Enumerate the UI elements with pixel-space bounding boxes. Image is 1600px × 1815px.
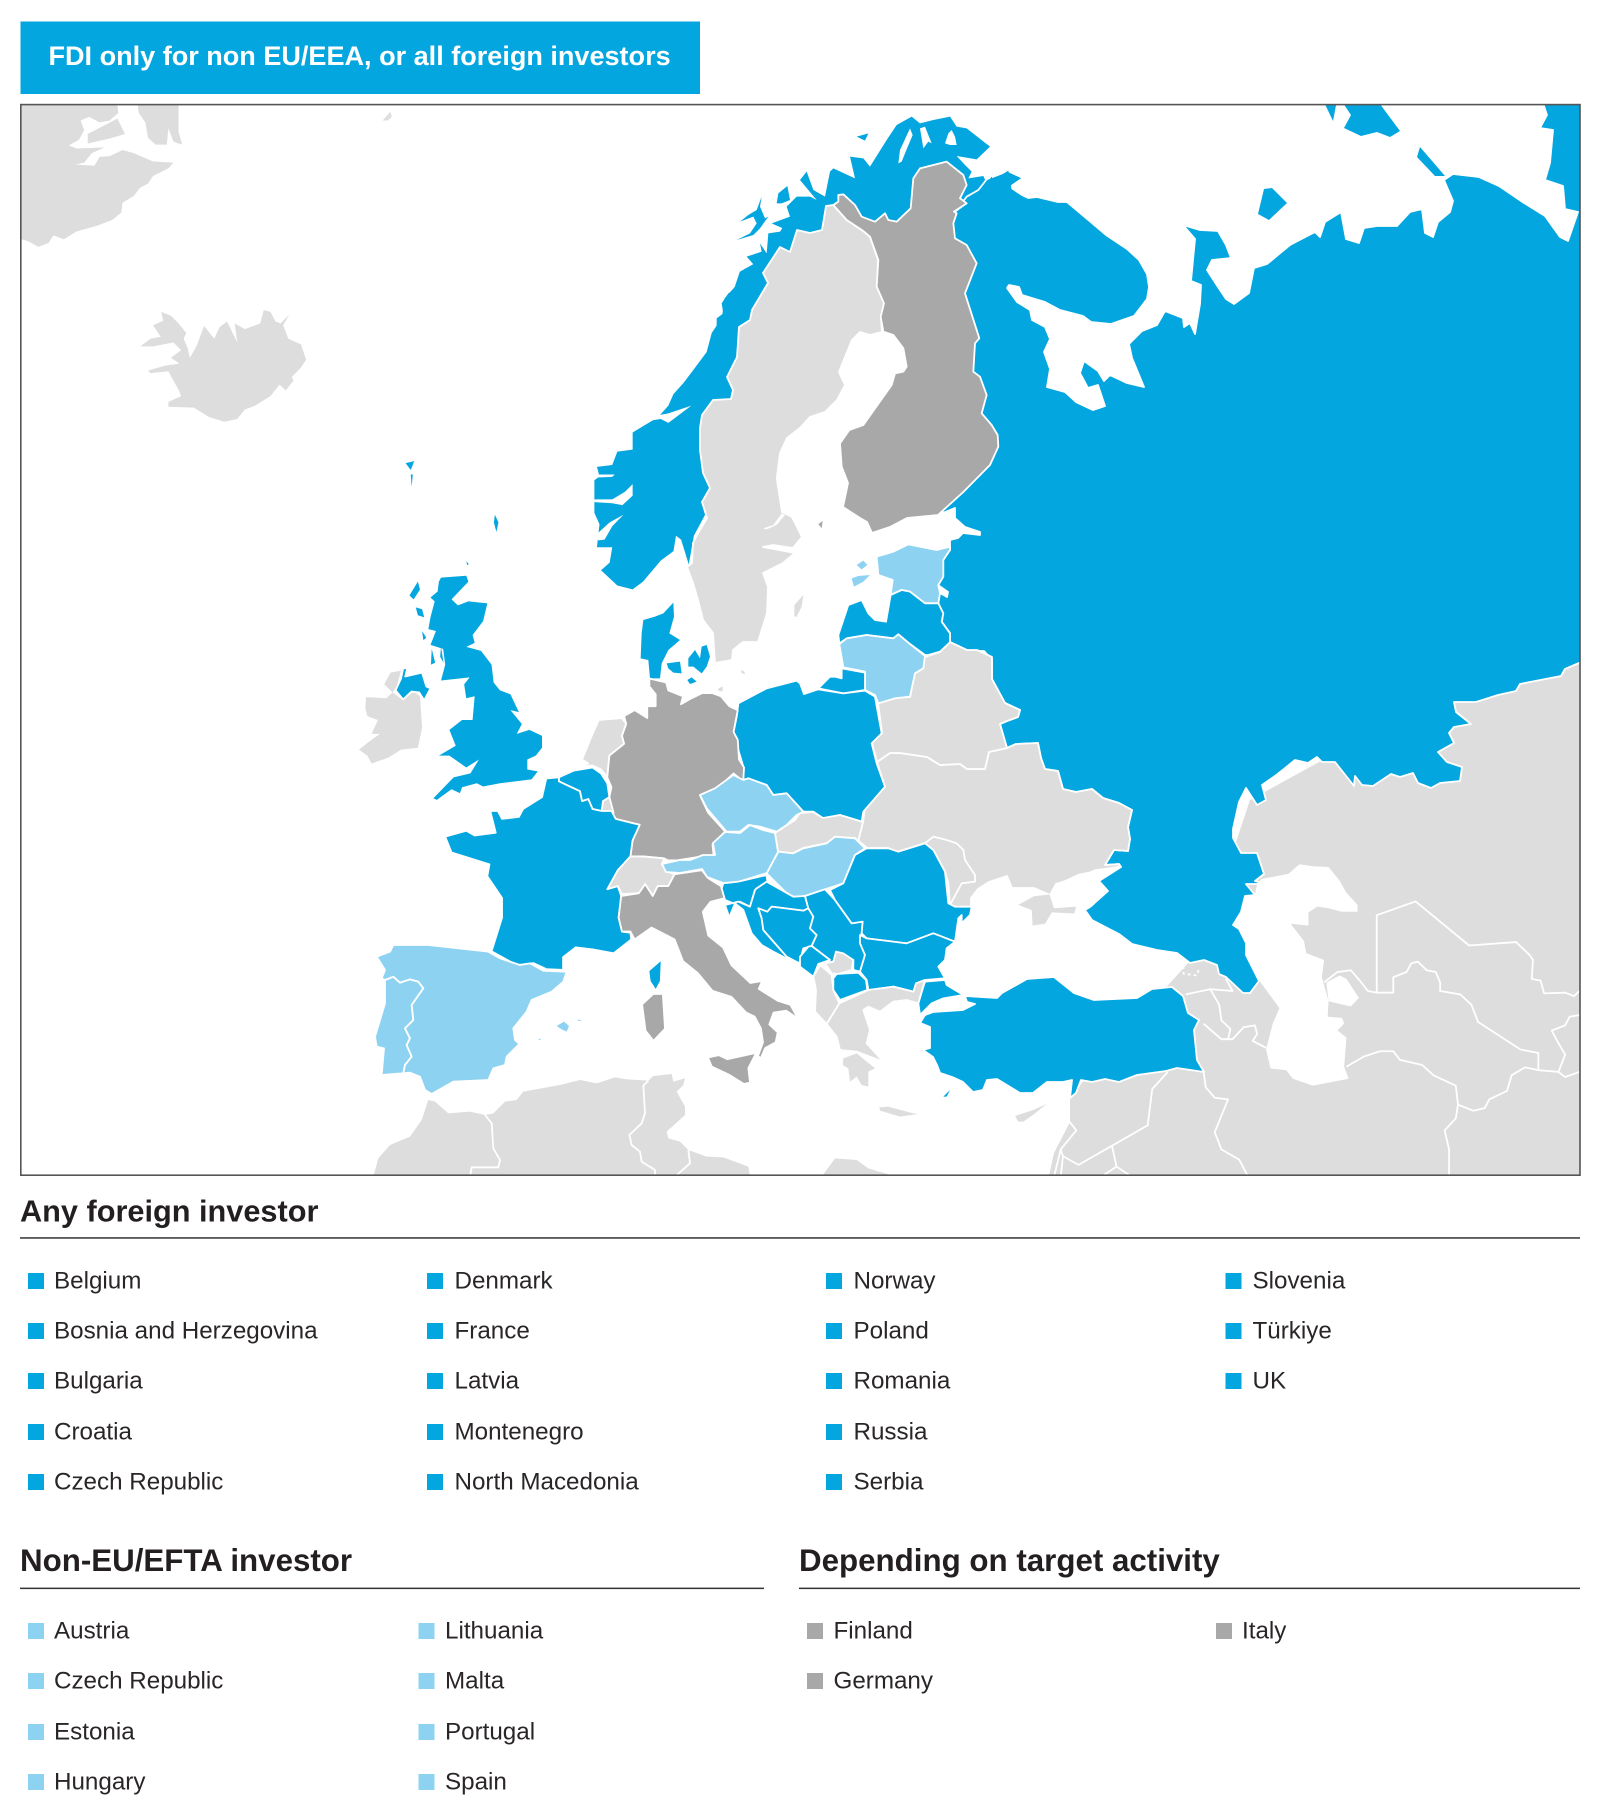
Denmark bbox=[641, 603, 745, 692]
Slovakia bbox=[775, 812, 865, 853]
Romania bbox=[830, 843, 972, 943]
Lithuania bbox=[839, 634, 925, 703]
Albania bbox=[813, 965, 839, 1024]
column 3: Poland bbox=[854, 1318, 929, 1344]
France bbox=[445, 777, 640, 970]
column 2 bbox=[427, 1268, 639, 1496]
column 1: Belgium bbox=[54, 1268, 141, 1294]
title banner bbox=[20, 22, 700, 94]
Latvia bbox=[838, 590, 950, 655]
Black Sea bbox=[1064, 866, 1120, 907]
column 2 bbox=[418, 1618, 544, 1796]
column 1: Bulgaria bbox=[54, 1368, 143, 1394]
map of Europe bbox=[21, 100, 1590, 1180]
column 1: Estonia bbox=[54, 1718, 135, 1746]
column 4: UK bbox=[1252, 1368, 1286, 1394]
legend: depending on target activity: Germany bbox=[834, 1668, 934, 1694]
legend: depending on target activity bbox=[807, 1618, 1287, 1694]
Serbia bbox=[805, 889, 865, 972]
Caspian Sea bbox=[1233, 864, 1359, 1086]
legend: depending on target activity: Italy bbox=[1242, 1618, 1287, 1644]
column 2: North Macedonia bbox=[454, 1468, 639, 1496]
rule bbox=[20, 1588, 764, 1589]
Slovenia bbox=[722, 875, 767, 907]
Crimea bbox=[1018, 895, 1076, 926]
Russia bbox=[920, 100, 1590, 993]
title banner: FDI only for non EU/EEA, or all foreign investors bbox=[48, 41, 671, 71]
column 2: Lithuania bbox=[445, 1618, 544, 1644]
Spain bbox=[377, 945, 582, 1094]
column 1: Croatia bbox=[54, 1418, 133, 1446]
Kosovo bbox=[825, 952, 853, 974]
Poland bbox=[733, 681, 885, 822]
Kaliningrad bbox=[818, 668, 865, 693]
Greece bbox=[827, 980, 925, 1117]
United Kingdom bbox=[396, 561, 542, 800]
Faroe and Shetland islands bbox=[406, 461, 498, 532]
Switzerland bbox=[607, 856, 675, 896]
Moldova bbox=[925, 837, 975, 905]
Finland bbox=[818, 162, 998, 533]
Norway bbox=[594, 117, 1013, 589]
column 4: Türkiye bbox=[1252, 1318, 1332, 1344]
Ireland bbox=[359, 671, 422, 764]
Cyprus bbox=[1015, 1104, 1047, 1122]
Corsica bbox=[649, 961, 661, 989]
Turkey bbox=[918, 977, 1204, 1098]
heading: any foreign investor: Any foreign investor bbox=[20, 1193, 318, 1228]
Bosnia and Herzegovina bbox=[758, 907, 817, 963]
column 1 bbox=[28, 1618, 223, 1796]
North Macedonia bbox=[833, 973, 867, 1000]
column 1: Austria bbox=[54, 1618, 130, 1644]
column 3: Norway bbox=[854, 1268, 936, 1294]
map frame bbox=[21, 105, 1580, 1175]
Montenegro bbox=[800, 946, 830, 977]
column 1: Hungary bbox=[54, 1768, 146, 1796]
column 3 bbox=[826, 1268, 951, 1496]
heading: non-EU/EFTA investor: Non-EU/EFTA investor bbox=[20, 1543, 352, 1578]
column 4: Slovenia bbox=[1252, 1268, 1346, 1294]
column 1: Czech Republic bbox=[54, 1668, 223, 1694]
Germany bbox=[607, 679, 744, 860]
Hungary bbox=[767, 837, 865, 897]
column 1: Czech Republic bbox=[54, 1468, 223, 1496]
country borders: Central Asia and Middle East bbox=[1054, 901, 1579, 1177]
column 4 bbox=[1226, 1268, 1346, 1394]
Croatia bbox=[725, 882, 808, 965]
rule bbox=[20, 1237, 1580, 1239]
Middle East and Central Asia land bbox=[1048, 655, 1590, 1180]
legend: depending on target activity: Finland bbox=[834, 1618, 913, 1644]
column 3: Romania bbox=[854, 1368, 951, 1394]
Netherlands bbox=[583, 719, 625, 775]
Italy bbox=[619, 870, 798, 1083]
column 1 bbox=[28, 1268, 318, 1496]
rule bbox=[799, 1588, 1580, 1589]
Sweden bbox=[687, 205, 884, 663]
column 2: Denmark bbox=[454, 1268, 554, 1294]
Czech Republic bbox=[700, 775, 803, 832]
column 2: Malta bbox=[445, 1668, 505, 1694]
Belgium bbox=[559, 767, 609, 811]
Portugal bbox=[375, 977, 423, 1075]
Norway–Russia border bbox=[956, 180, 988, 212]
North Africa bbox=[373, 1074, 897, 1177]
Luxembourg bbox=[602, 797, 614, 813]
column 2: Portugal bbox=[445, 1718, 535, 1746]
Barents coast and Arctic Russia fragments bbox=[1258, 100, 1445, 220]
Belarus bbox=[872, 642, 1020, 769]
column 1: Bosnia and Herzegovina bbox=[54, 1318, 318, 1344]
legend: non-EU/EFTA investor bbox=[28, 1618, 544, 1796]
Bulgaria bbox=[860, 933, 955, 992]
column 3: Serbia bbox=[854, 1468, 924, 1496]
Estonia bbox=[852, 544, 950, 603]
column 2: Latvia bbox=[454, 1368, 520, 1394]
Austria bbox=[662, 825, 778, 883]
legend: any foreign investor bbox=[28, 1268, 1346, 1496]
Iceland bbox=[140, 310, 306, 422]
Greenland bbox=[21, 105, 392, 247]
heading: depending on target activity: Depending on target activity bbox=[799, 1543, 1220, 1578]
column 2: Spain bbox=[445, 1768, 507, 1796]
column 3: Russia bbox=[854, 1418, 928, 1446]
Ukraine bbox=[855, 743, 1132, 910]
column 2: Montenegro bbox=[454, 1418, 584, 1446]
column 2: France bbox=[454, 1318, 530, 1344]
